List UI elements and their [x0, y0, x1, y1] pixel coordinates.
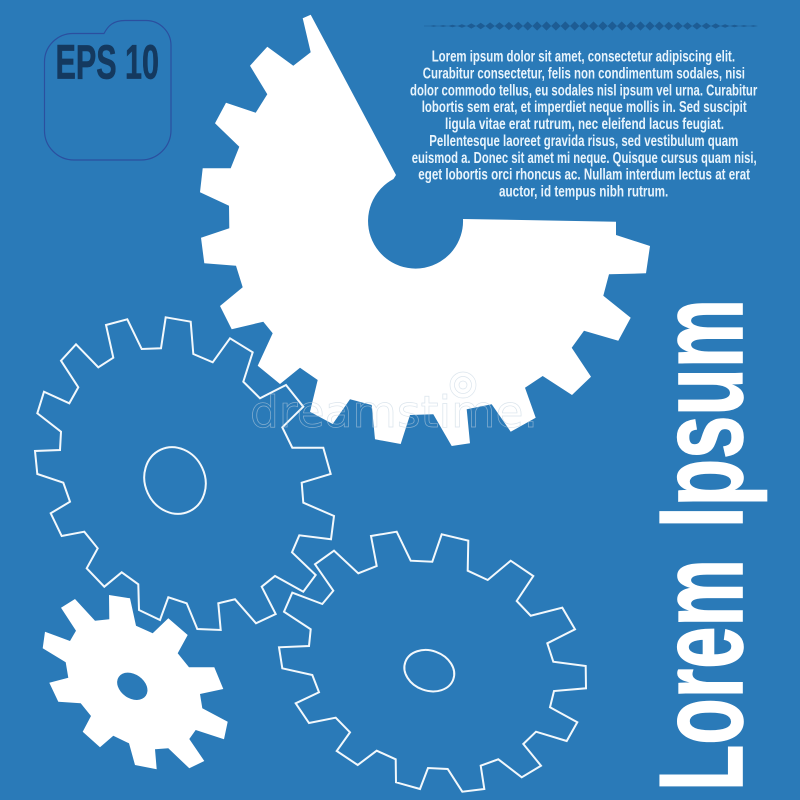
text block: lorem ipsum paragraph: auctor, id tempus nibh rutrum. [499, 184, 668, 200]
watermark: dreamstime: dreamstime. [250, 387, 538, 438]
icon: outlined gear, left [35, 317, 334, 630]
icon: small white gear [43, 595, 228, 769]
badge: EPS 10: EPS 10 [56, 36, 159, 90]
badge: EPS 10 [44, 20, 171, 160]
heading: vertical Lorem Ipsum: Ipsum [635, 299, 768, 528]
icon: outlined gear, bottom right [279, 532, 586, 792]
text block: lorem ipsum paragraph [410, 49, 757, 201]
divider: diamond ornament [424, 21, 758, 31]
icon: large white gear with cut-away quarter [200, 15, 650, 446]
heading: vertical Lorem Ipsum: Lorem [635, 559, 768, 791]
